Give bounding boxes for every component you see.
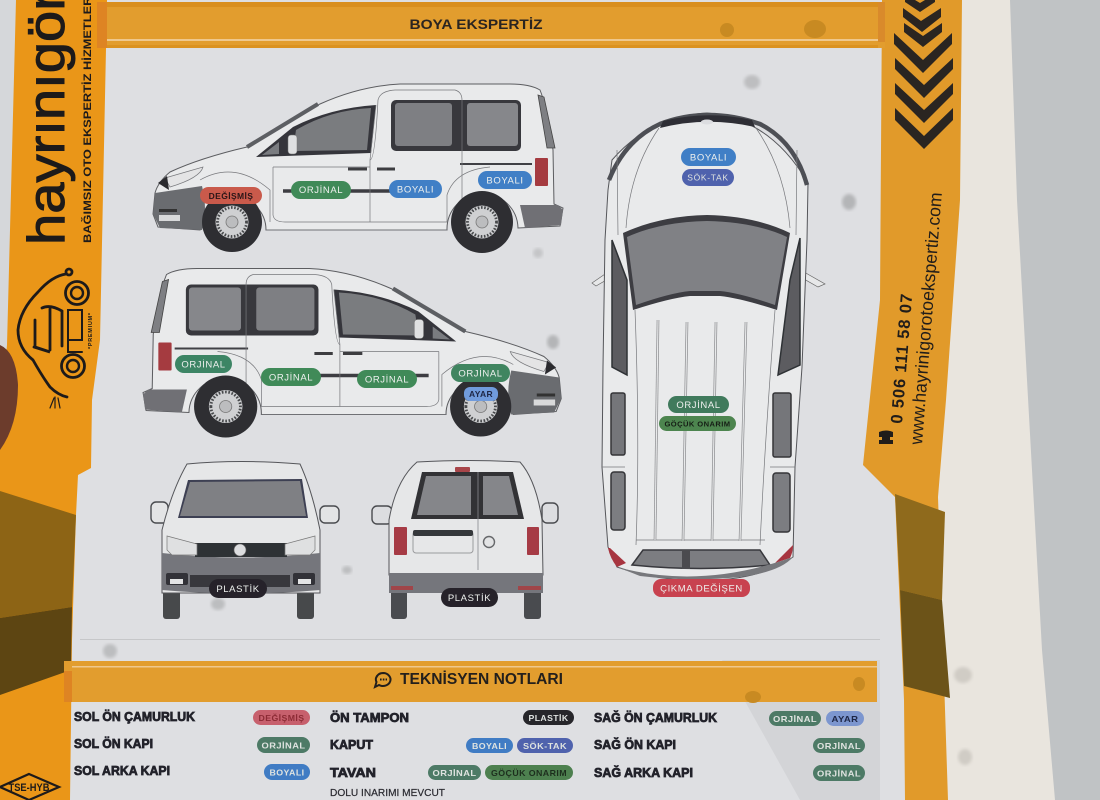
row: sağ ön kapı: ORJİNAL [817,741,861,751]
row: sol ön kapı: SOL ÖN KAPI [74,736,153,751]
pill: orjinal rear door [261,368,321,386]
van: left side view [153,84,563,253]
row: kaput: BOYALI [472,741,507,751]
pill: orjinal: ORJİNAL [299,185,343,196]
right dark band lower [900,590,950,698]
pill: sök-tak [682,169,734,186]
pill: göçük onarım [659,416,736,431]
row: sağ ön çamurluk: AYAR [832,714,858,724]
row: sol arka kapı: SOL ARKA KAPI [74,764,170,778]
pill: çıkma değişen [653,579,750,597]
pill: ayar: AYAR [469,389,493,399]
row: tavan: GÖÇÜK ONARIM [491,768,567,778]
pill: çıkma değişen: ÇIKMA DEĞİŞEN [660,584,743,594]
icon: speech bubble [375,673,390,687]
row: sol ön çamurluk: DEĞİŞMİŞ [258,712,304,723]
row: ön tampon: ÖN TAMPON [330,710,409,725]
pill: orjinal front door: ORJİNAL [365,374,409,386]
thumb [0,345,18,450]
right orange band [863,0,962,800]
pill: değişmiş: DEĞİŞMİŞ [209,190,253,201]
row: sağ ön çamurluk: ORJİNAL [773,714,817,724]
icon: car logo [18,269,94,408]
row: tavan [330,765,573,780]
left dark band upper [0,491,76,618]
van: front view [151,462,339,619]
pill: orjinal roof [668,396,729,413]
van: right side view [143,268,561,438]
paper shading [80,75,972,800]
pill: orjinal fender [451,364,510,382]
pill: boyalı hood: BOYALI [690,152,727,164]
heading: BOYA EKSPERTİZ [410,16,543,32]
row: sol ön çamurluk [74,709,310,725]
pill: değişmiş [200,187,262,204]
row: sol ön kapı [74,736,310,753]
row: sağ arka kapı: SAĞ ARKA KAPI [594,765,693,780]
row: kaput: KAPUT [330,738,373,752]
row: tavan: ORJİNAL [432,768,476,778]
notes header bar [64,661,877,703]
logo: TSE-HYB [0,774,59,800]
row: sağ arka kapı: ORJİNAL [817,768,861,778]
row: sağ arka kapı [594,765,865,781]
website: www.hayrinigorotoekspertiz.com [906,192,946,446]
chevrons [894,0,953,149]
row: sol ön çamurluk: SOL ÖN ÇAMURLUK [74,709,195,724]
row: sol arka kapı: BOYALI [270,768,304,778]
row: sağ ön çamurluk: SAĞ ÖN ÇAMURLUK [594,710,717,725]
pill: boyalı door: BOYALI [397,184,434,196]
brand name: hayrınıgör [18,0,76,245]
pill: ayar [464,387,498,401]
left dark band lower [0,607,72,695]
row: ön tampon: PLASTİK [528,713,569,723]
pill: orjinal rear [175,355,232,373]
pill: boyalı door [389,180,442,198]
row: tavan: TAVAN [330,766,376,780]
pill: sök-tak: SÖK-TAK [687,172,729,182]
notes table [74,709,865,799]
premium label: *PREMIUM* [88,312,94,349]
row: kaput [330,738,573,753]
row: sağ ön kapı [594,737,865,753]
van: rear view [372,460,558,619]
pill: orjinal rear door: ORJİNAL [269,372,313,384]
pill: orjinal fender: ORJİNAL [458,368,503,380]
pill: plastik rear: PLASTİK [448,593,491,604]
left orange band [0,0,107,800]
row: kaput: SÖK-TAK [523,741,567,751]
logo: TSE-HYB: TSE-HYB [8,782,50,794]
note: dolu onarımı: DOLU INARIMI MEVCUT [330,788,445,799]
pill: boyalı hood [681,148,736,166]
pill: boyalı rear: BOYALI [486,176,524,186]
row: ön tampon [330,710,574,725]
row: sağ ön çamurluk [594,710,864,726]
pill: orjinal front door [357,370,417,388]
pill: orjinal rear: ORJİNAL [181,360,226,370]
pill: orjinal [291,181,351,199]
brand tagline: BAĞIMSIZ OTO EKSPERTİZ HİZMETLERİ [81,0,94,243]
row: sağ ön kapı: SAĞ ÖN KAPI [594,737,676,752]
pill: plastik front: PLASTİK [216,584,260,595]
title bar: boya ekspertiz [97,2,885,48]
pill: plastik front [209,579,267,598]
pill: orjinal roof: ORJİNAL [676,400,721,411]
phone number: 0 506 111 58 07 [888,293,916,424]
pill: plastik rear [441,588,498,607]
right dark band upper [895,494,945,600]
icon: phone [879,430,893,444]
heading: TEKNİSYEN NOTLARI [400,671,563,688]
pill: göçük onarım: GÖÇÜK ONARIM [664,420,730,428]
van: top view [592,113,825,597]
pill: boyalı rear [478,171,532,189]
row: sol ön kapı: ORJİNAL [262,740,306,750]
row: sol arka kapı [74,764,310,780]
